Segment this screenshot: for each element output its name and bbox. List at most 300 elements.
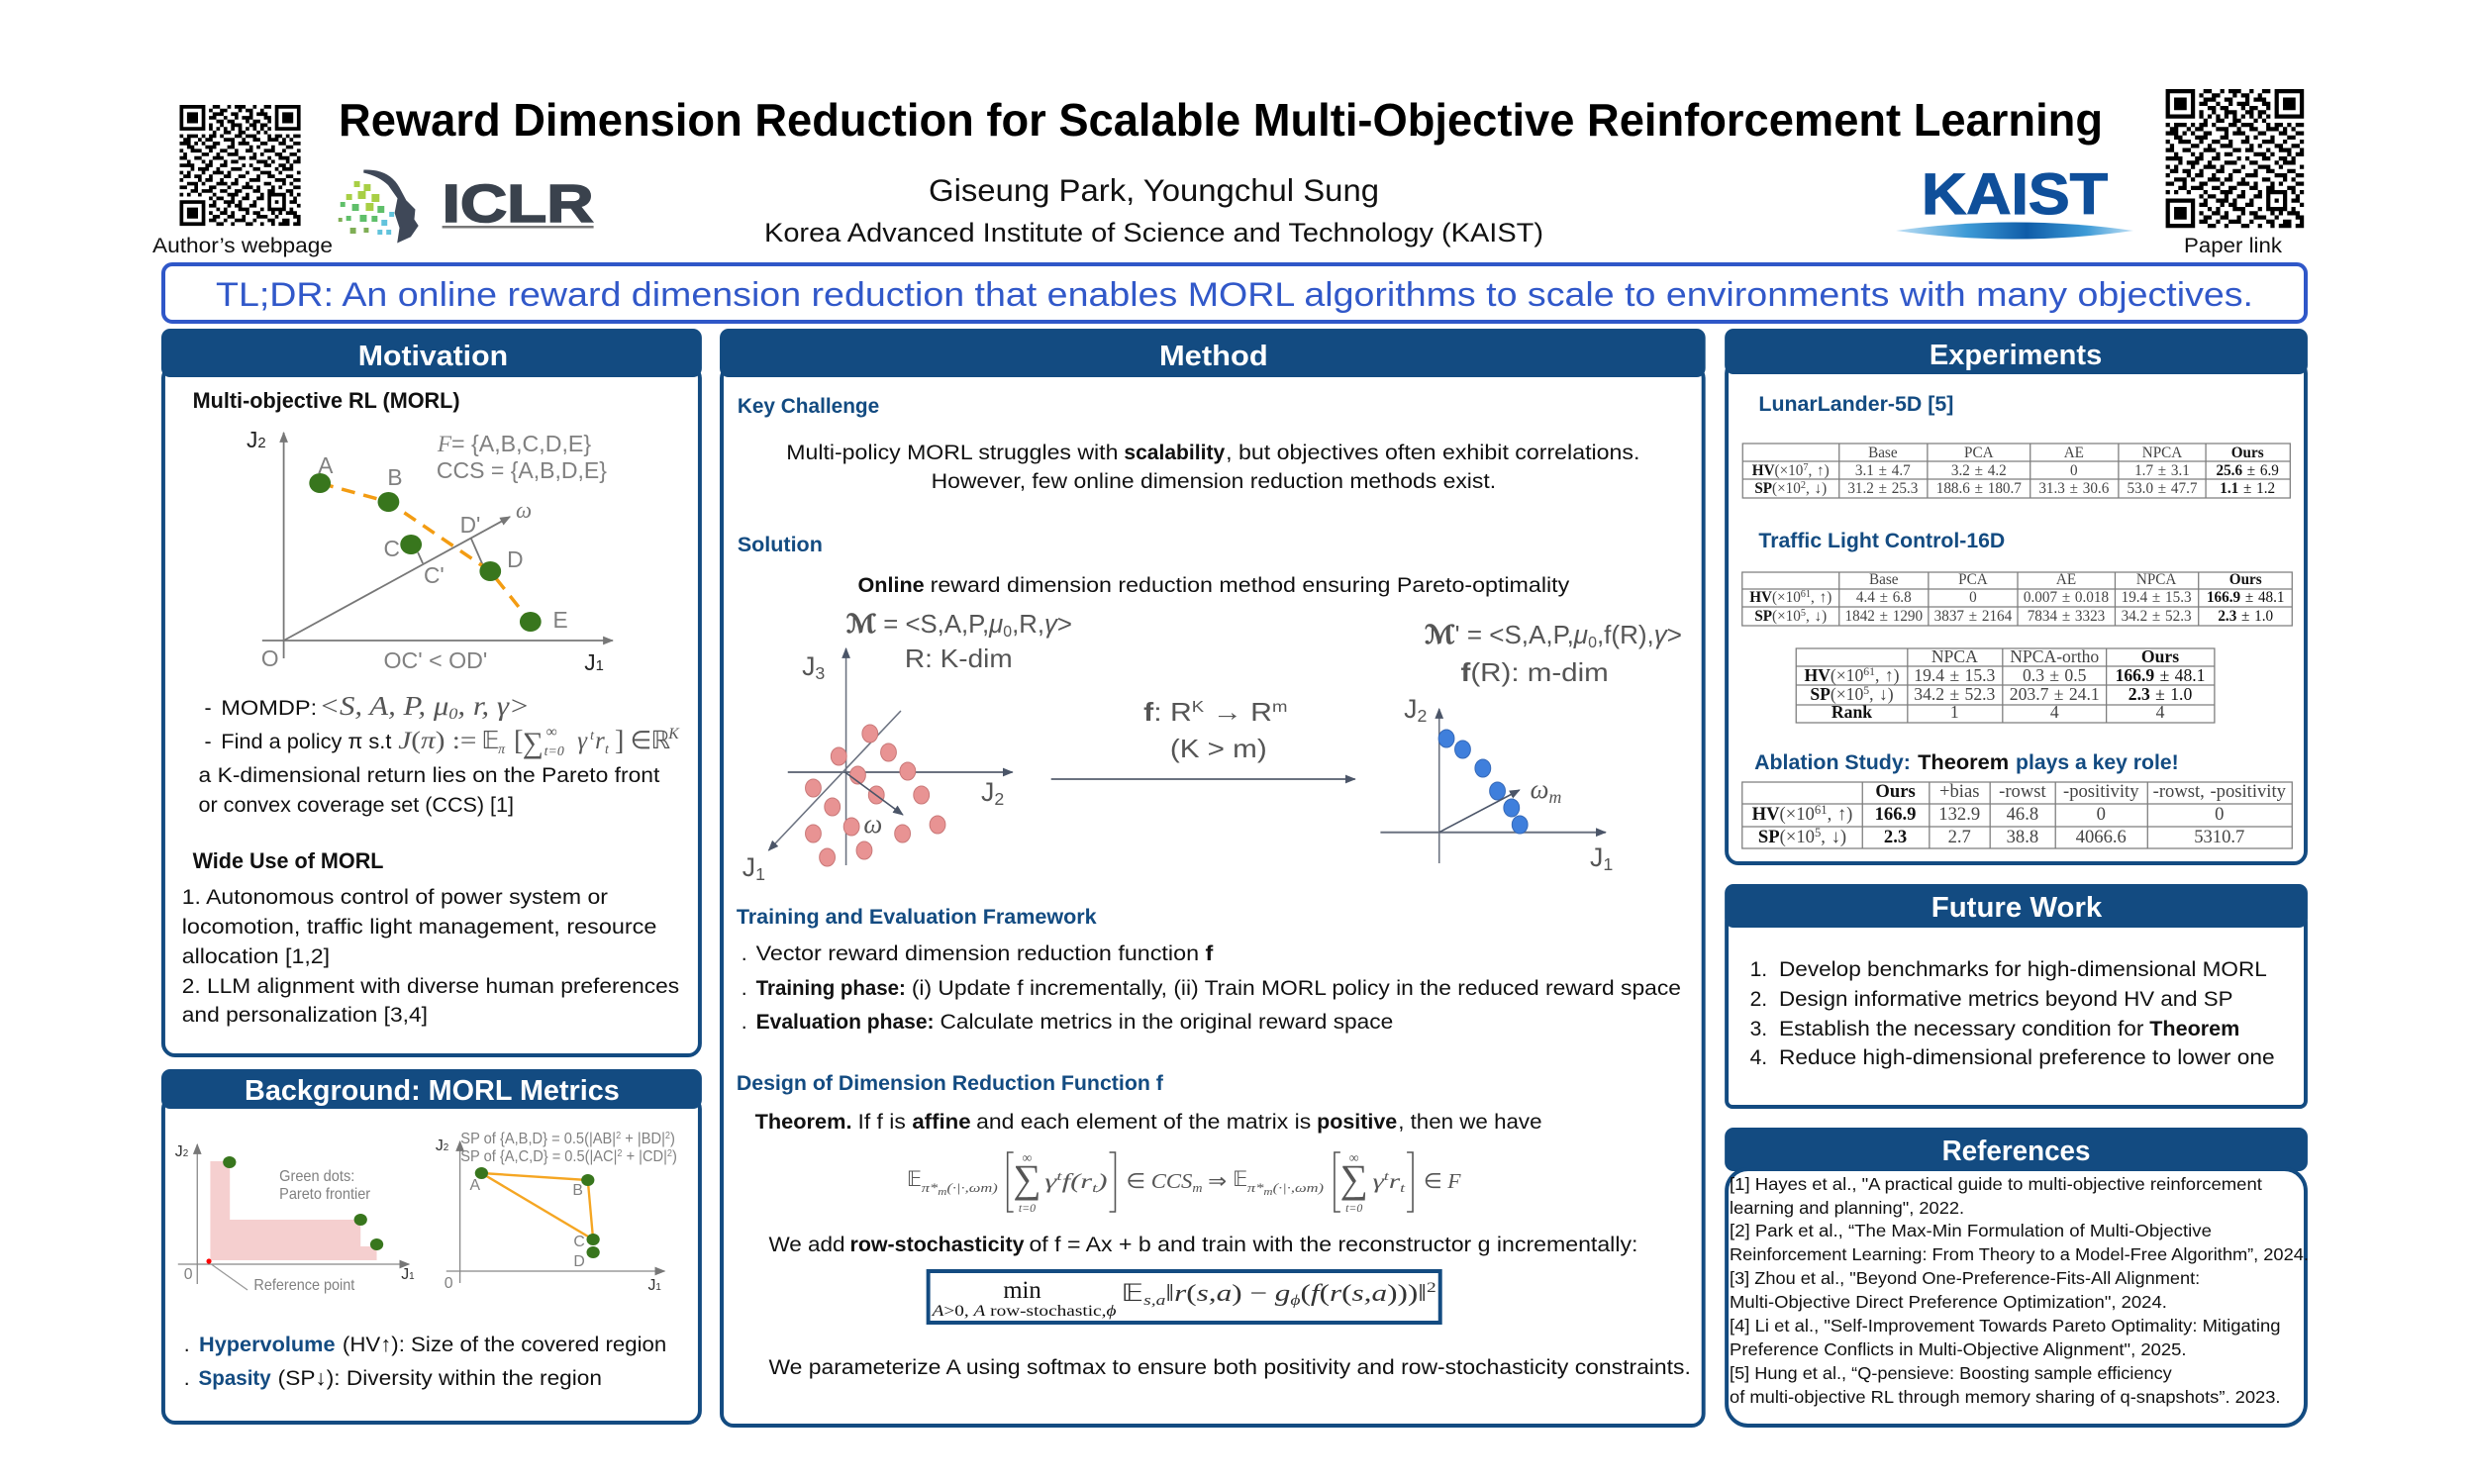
subheading: Multi-objective RL: Multi-objective RL (MORL) (193, 388, 460, 413)
table: NPCA comparison: HV(×10 (1804, 665, 1863, 685)
text: policy objective: [ (514, 725, 524, 756)
formula: theorem: ∈ CCS (1126, 1169, 1189, 1193)
text: reference list: [1] Hayes et al., "A practical guide to multi-objective reinforcement (1730, 1174, 2262, 1194)
formula: theorem: m (1192, 1180, 1203, 1195)
table: Traffic Light results: 2.3 ± 1.0 (2218, 608, 2273, 625)
formula: reduced MOMDP (1425, 621, 1682, 687)
table: Ablation results: Ours (1875, 781, 1916, 802)
subheading: Wide Use of MORL: Wide Use of MORL (193, 848, 383, 873)
text: training list: . (742, 976, 747, 1000)
table: NPCA comparison: , ↓) (1869, 684, 1894, 705)
TL;DR banner: TL;DR: An online reward dimension reduction that enables MORL algorithms to scale to environments with many objectives. (216, 276, 2253, 314)
text: future work list: 1. (1750, 957, 1767, 981)
formula box: reconstruction objective: 2 (1427, 1280, 1436, 1296)
table: LunarLander results: Base (1868, 445, 1898, 461)
chart: Pareto front: D (507, 546, 524, 572)
text: theorem statement: positive (1317, 1110, 1397, 1134)
table: Ablation results: 166.9 (1875, 804, 1916, 825)
text: policy objective: 𝔼 (481, 728, 499, 754)
formula: theorem: t=0 (1345, 1201, 1362, 1215)
table: Traffic Light results: NPCA (2136, 571, 2176, 588)
panel: Future Work (1725, 884, 2308, 1107)
formula: theorem: r (1389, 1169, 1401, 1193)
table: NPCA comparison: 203.7 ± 24.1 (2010, 684, 2100, 704)
caption: Author's webpage: Author’s webpage (152, 235, 333, 257)
text: future work list: 2. (1750, 987, 1767, 1011)
table: LunarLander results: SP(×10 (1754, 480, 1801, 497)
chart: sparsity: SP of {A,C,D} = 0.5(|AC| (460, 1148, 630, 1165)
table: NPCA comparison: 4 (2156, 702, 2165, 722)
chart: hypervolume: 0 (184, 1266, 193, 1283)
chart: sparsity: 2 (665, 1131, 670, 1141)
text: policy objective: t=0 (544, 744, 564, 759)
table: LunarLander results: 25.6 ± 6.9 (2216, 462, 2279, 479)
table: LunarLander results: 3.2 ± 4.2 (1951, 462, 2007, 479)
text: policy objective (204, 724, 680, 759)
subheading: Ablation Study: Ablation Study: (1754, 750, 1911, 774)
table: LunarLander results: 0 (2070, 462, 2078, 479)
text: training list: Evaluation phase: (756, 1010, 935, 1034)
logo: KAIST (1896, 162, 2133, 240)
text: theorem statement: affine (912, 1110, 971, 1134)
text: key challenge body: However, few online dimension reduction methods exist. (932, 469, 1496, 493)
formula box: reconstruction objective: f(r(s,a )))‖ (1311, 1281, 1417, 1307)
table: Traffic Light results: Ours (2229, 571, 2262, 588)
text: solution summary: reward dimension reduction method ensuring Pareto-optimality (931, 573, 1570, 597)
chart: K-dimensional scatter: ω (863, 809, 882, 839)
table: Ablation results: , ↓) (1821, 827, 1846, 847)
chart: Pareto front: C' (424, 562, 445, 588)
text: sparsity definition: . (184, 1366, 190, 1390)
text: training list: . (742, 1010, 747, 1034)
text: MOMDP: MOMDP: (221, 696, 317, 720)
formula: theorem: t (1384, 1168, 1389, 1183)
table: Ablation results: HV(×10 (1752, 804, 1815, 825)
panel: Motivation (161, 329, 702, 1055)
arrow: dimension reduction map f: K (1192, 699, 1205, 716)
table: Ablation results: 0 (2215, 804, 2224, 825)
formula: theorem: ∑ (1340, 1157, 1368, 1201)
text: reference list: [3] Zhou et al., "Beyond One-Preference-Fits-All Alignment: (1730, 1268, 2200, 1288)
text: reference list: [2] Park et al., “The Max-Min Formulation of Multi-Objective (1730, 1221, 2212, 1240)
formula: reduced MOMDP: 0 (1588, 635, 1597, 651)
chart: sparsity: 2 (667, 1148, 672, 1159)
formula: theorem: γ (1044, 1169, 1052, 1193)
logo: KAIST: KAIST (1922, 162, 2108, 227)
chart: hypervolume: J2 (175, 1143, 189, 1160)
text: training list: Vector reward dimension reduction function f (756, 941, 1214, 965)
arrow: dimension reduction map f: → R (1204, 699, 1272, 727)
formula: theorem: ∑ (1013, 1157, 1041, 1201)
heading: Motivation: Motivation (358, 341, 508, 372)
formula: theorem: ⇒ (1203, 1169, 1227, 1193)
QR code: paper link (2166, 89, 2304, 228)
chart: K-dimensional scatter: 3 (815, 663, 825, 683)
table: Traffic Light results: 1842 ± 1290 (1845, 608, 1923, 625)
formula: theorem: ∈ F (1424, 1169, 1461, 1193)
text: MOMDP: - (204, 696, 212, 720)
table: Traffic Light results: SP(×10 (1754, 608, 1801, 625)
subheading: LunarLander-5D: LunarLander-5D [5] (1758, 392, 1953, 416)
text: MOMDP (204, 691, 530, 723)
formula: theorem: t=0 (1019, 1201, 1036, 1215)
logo text: ICLR: ICLR (443, 174, 594, 234)
panel: References (1725, 1128, 2309, 1426)
table: NPCA comparison: SP(×10 (1810, 684, 1863, 704)
text: future work list: 4. (1750, 1045, 1767, 1069)
chart: sparsity: J2 (436, 1138, 449, 1154)
chart: m-dimensional Pareto points: J (1404, 694, 1417, 724)
formula: theorem: f(r (1062, 1169, 1093, 1193)
chart: m-dimensional Pareto points: 2 (1417, 706, 1427, 726)
table: LunarLander results: 2 (1801, 480, 1806, 491)
text: row-stochasticity (768, 1233, 1637, 1256)
formula: theorem: t (1056, 1168, 1062, 1183)
table: Traffic Light results (1742, 571, 2292, 626)
chart: sparsity: + |CD| (623, 1148, 667, 1165)
text: hypervolume definition: . (184, 1333, 190, 1356)
text: Pareto front description (199, 763, 659, 817)
formula: reduced MOMDP: γ> (1654, 622, 1682, 649)
text: MOMDP: <S, A, P, μ (319, 691, 432, 721)
table: Ablation results: 5310.7 (2194, 827, 2244, 847)
chart: hypervolume: Pareto frontier (279, 1186, 371, 1203)
text: reference list: [4] Li et al., "Self-Improvement Towards Pareto Optimality: Mitigating (1730, 1316, 2281, 1336)
chart: K-dimensional scatter: J (742, 852, 755, 882)
formula box: reconstruction objective: 𝔼 (1121, 1281, 1138, 1307)
table: LunarLander results: PCA (1964, 445, 1994, 461)
text: future work list: Reduce high-dimensional preference to lower one (1779, 1045, 2275, 1069)
formula: theorem: m (1263, 1187, 1273, 1198)
subheading: Ablation Study: plays a key role! (2016, 750, 2179, 774)
heading: Experiments: Experiments (1930, 340, 2102, 371)
formula: theorem: π* (1247, 1180, 1260, 1195)
table: NPCA comparison: NPCA (1931, 646, 1978, 666)
text: hypervolume definition: (HV↑): Size of the covered region (343, 1333, 666, 1356)
formula: original MOMDP: ,R, (1012, 611, 1044, 639)
formula box: reconstruction objective: ( (1301, 1281, 1311, 1307)
table: Ablation results: -rowst (1999, 781, 2046, 802)
text: softmax parameterization: We parameterize A using softmax to ensure both positivity and row-stochasticity constraints. (768, 1355, 1691, 1379)
text: policy objective: J(π) := (398, 728, 476, 754)
chart: Pareto front: F= {A,B,C,D,E} (437, 431, 591, 456)
table: LunarLander results: 31.2 ± 25.3 (1847, 480, 1919, 497)
chart: sparsity: + |BD| (621, 1131, 665, 1147)
text: policy objective: Find a policy π s.t (221, 730, 391, 753)
formula: theorem: ) (1096, 1169, 1108, 1193)
chart: K-dimensional scatter: J (802, 651, 815, 681)
text: policy objective: ∞ (546, 724, 557, 741)
formula: original MOMDP: ℳ = <S,A,P,μ (846, 610, 1003, 639)
formula: theorem: t (1400, 1180, 1406, 1195)
text: reference list: Preference Conflicts in Multi-Objective Alignment", 2025. (1730, 1339, 2186, 1359)
table: Ablation results: 132.9 (1938, 804, 1980, 825)
text: policy objective: ] (615, 725, 624, 756)
table: NPCA comparison: 34.2 ± 52.3 (1914, 684, 1995, 704)
formula: original MOMDP: γ> (1044, 611, 1072, 639)
table: Ablation results: 46.8 (2007, 804, 2038, 825)
formula: theorem: ∞ (1023, 1151, 1032, 1166)
formula box: reconstruction objective: ϕ (1290, 1293, 1301, 1309)
table: Ablation results: -rowst, -positivity (2153, 781, 2287, 802)
table: NPCA comparison (1796, 646, 2215, 723)
text: future work list: Establish the necessary condition for (1779, 1017, 2143, 1040)
heading: Design of Dimension Reduction Function f: Design of Dimension Reduction Function f (737, 1071, 1164, 1095)
formula: theorem (907, 1151, 1461, 1215)
chart: sparsity: C (573, 1234, 585, 1250)
table: LunarLander results: 7 (1803, 462, 1808, 473)
text: sparsity definition: (SP↓): Diversity within the region (278, 1366, 602, 1390)
table: Ablation results: 5 (1815, 826, 1821, 840)
text: uses list: allocation [1,2] (182, 944, 330, 968)
authors: Giseung Park, Youngchul Sung (929, 172, 1379, 208)
text: policy objective: ∈ (631, 728, 651, 754)
formula: original MOMDP (846, 610, 1072, 673)
chart: hypervolume: Reference point (253, 1277, 355, 1294)
table: Traffic Light results: 0.007 ± 0.018 (2024, 589, 2109, 606)
table: LunarLander results: 188.6 ± 180.7 (1936, 480, 2022, 497)
text: theorem statement: , then we have (1398, 1110, 1542, 1134)
panel: Experiments (1725, 329, 2308, 863)
chart: Pareto front: J2 (247, 427, 266, 452)
chart: sparsity (436, 1131, 677, 1294)
formula box: reconstruction objective: s,a (1143, 1293, 1165, 1309)
text: theorem statement: If f is (857, 1110, 906, 1134)
logo: ICLR (339, 171, 417, 241)
table: Ablation results: SP(×10 (1758, 827, 1815, 847)
table: Traffic Light results: 166.9 ± 48.1 (2207, 589, 2285, 606)
text: Pareto front description: a K-dimensional return lies on the Pareto front (199, 763, 659, 787)
table: NPCA comparison: 2.3 ± 1.0 (2128, 684, 2192, 704)
chart: Pareto front: D' (460, 512, 480, 538)
table: Traffic Light results: 4.4 ± 6.8 (1856, 589, 1912, 606)
table: NPCA comparison: 61 (1863, 664, 1875, 678)
chart: hypervolume: J1 (401, 1266, 415, 1283)
table: LunarLander results: AE (2064, 445, 2084, 461)
formula: theorem: γ (1372, 1169, 1381, 1193)
table: LunarLander results: 1.7 ± 3.1 (2134, 462, 2190, 479)
table: Ablation results: 38.8 (2007, 827, 2038, 847)
formula: theorem: π* (922, 1180, 935, 1195)
table: Ablation results: 2.7 (1948, 827, 1971, 847)
text: policy objective: ∑ (523, 727, 544, 759)
text: sparsity definition: Spasity (199, 1366, 271, 1390)
table: LunarLander results (1742, 444, 2290, 498)
text: row-stochasticity: of f = Ax + b and train with the reconstructor g incrementally: (1029, 1233, 1637, 1256)
text: policy objective: t (605, 742, 610, 757)
text: reference list (1730, 1174, 2309, 1407)
chart: sparsity: J1 (648, 1277, 661, 1294)
table: NPCA comparison: NPCA-ortho (2010, 646, 2099, 666)
text: policy objective: π (498, 742, 506, 757)
chart: K-dimensional scatter: J (981, 777, 994, 807)
formula box: reconstruction objective: min (1003, 1277, 1041, 1304)
heading: Future Work: Future Work (1931, 892, 2102, 924)
chart: sparsity: SP of {A,B,D} = 0.5(|AB| (460, 1131, 629, 1147)
subheading: Ablation Study: Theorem (1918, 750, 2009, 774)
chart: m-dimensional Pareto points: J (1590, 842, 1603, 872)
text: key challenge body: , but objectives often exhibit correlations. (1226, 441, 1639, 464)
formula box: reconstruction objective: ‖ (1165, 1281, 1174, 1307)
table: Traffic Light results: 19.4 ± 15.3 (2122, 589, 2192, 606)
heading: Background: Background: MORL Metrics (245, 1075, 620, 1107)
chart: m-dimensional Pareto points (1380, 694, 1613, 874)
arrow: dimension reduction map f: f: R (1143, 699, 1186, 727)
panel: Method (720, 329, 1706, 1426)
affiliation: Korea Advanced Institute of Science and Technology (KAIST) (764, 218, 1543, 247)
text: training list (742, 941, 1681, 1034)
text: policy objective: r (595, 728, 605, 754)
chart: Pareto front: B (387, 464, 403, 490)
table: Ablation results: 61 (1815, 803, 1828, 817)
text: policy objective: K (667, 726, 680, 742)
chart: Pareto front (247, 427, 613, 675)
text: policy objective: t (590, 729, 595, 743)
text: MOMDP: 0 (448, 706, 457, 723)
chart: Pareto front: A (318, 452, 334, 478)
table: NPCA comparison: 1 (1950, 702, 1959, 722)
chart: m-dimensional Pareto points: ω (1531, 774, 1549, 804)
text: row-stochasticity: We add (768, 1233, 845, 1256)
panel: Background (161, 1069, 702, 1423)
table: Traffic Light results: HV(×10 (1749, 589, 1801, 606)
text: Pareto front description: or convex coverage set (CCS) [1] (199, 793, 514, 817)
table: NPCA comparison: , ↑) (1875, 665, 1900, 686)
chart: sparsity: A (470, 1177, 480, 1194)
chart: Pareto front: O (261, 645, 279, 671)
table: Traffic Light results: , ↓) (1806, 608, 1827, 625)
chart: sparsity: ) (670, 1131, 675, 1147)
chart: K-dimensional scatter: 2 (994, 789, 1004, 809)
table: Traffic Light results: 3837 ± 2164 (1934, 608, 2013, 625)
text: uses list: 1. Autonomous control of power system or (182, 885, 608, 909)
text: hypervolume definition (184, 1333, 666, 1356)
formula box: reconstruction objective: A>0, A row-stochastic, ϕ (931, 1303, 1116, 1320)
text: row-stochasticity: row-stochasticity (850, 1233, 1025, 1256)
table: NPCA comparison: Rank (1832, 702, 1872, 722)
chart: Pareto front: ω (516, 498, 532, 523)
text: future work list: 3. (1750, 1017, 1767, 1040)
chart: sparsity: 2 (616, 1131, 622, 1141)
formula: theorem: m (938, 1187, 946, 1198)
table: Traffic Light results: Base (1869, 571, 1899, 588)
table: NPCA comparison: 5 (1863, 683, 1869, 697)
chart: K-dimensional scatter: 1 (755, 864, 765, 884)
table: LunarLander results: HV(×10 (1752, 462, 1803, 479)
table: Ablation results: 2.3 (1884, 827, 1907, 847)
table: Ablation results: +bias (1939, 781, 1979, 802)
arrow: dimension reduction map f: m (1272, 699, 1287, 716)
subheading: Ablation Study (1754, 750, 2179, 774)
table: Traffic Light results: 34.2 ± 52.3 (2122, 608, 2192, 625)
formula: theorem: t (1092, 1180, 1098, 1195)
arrow: dimension reduction map f: (K > m) (1170, 736, 1267, 763)
table: NPCA comparison: Ours (2141, 646, 2179, 666)
caption: Paper link: Paper link (2184, 235, 2283, 257)
chart: sparsity: 0 (445, 1275, 453, 1292)
formula box: reconstruction objective: r(s,a ) − g (1174, 1281, 1287, 1307)
chart: sparsity: D (573, 1253, 585, 1270)
table: Traffic Light results: 7834 ± 3323 (2028, 608, 2106, 625)
QR code: author's webpage (180, 105, 301, 226)
title: Reward Dimension Reduction for Scalable Multi-Objective Reinforcement Learning (339, 94, 2103, 146)
subheading: Traffic Light Control: Traffic Light Control-16D (1758, 529, 2005, 552)
text: uses list: locomotion, traffic light management, resource (182, 915, 656, 939)
table: Ablation results: , ↑) (1828, 804, 1852, 825)
formula: reduced MOMDP: ,f(R), (1597, 622, 1654, 649)
table: Traffic Light results: 0 (1969, 589, 1977, 606)
text: training list: Calculate metrics in the original reward space (940, 1010, 1393, 1034)
heading: Key Challenge: Key Challenge (738, 394, 879, 418)
text: uses list: 2. LLM alignment with diverse human preferences (182, 974, 679, 998)
chart: m-dimensional Pareto points: m (1549, 787, 1561, 807)
text: hypervolume definition: Hypervolume (199, 1333, 336, 1356)
text: key challenge body: scalability (1124, 441, 1225, 464)
chart: K-dimensional scatter (742, 648, 1013, 884)
table: Ablation results (1742, 781, 2292, 848)
table: Traffic Light results: PCA (1958, 571, 1988, 588)
text: key challenge body (786, 441, 1639, 493)
text: theorem statement: Theorem. (755, 1110, 852, 1134)
formula: theorem: 𝔼 (1233, 1167, 1247, 1191)
text: uses list (182, 885, 679, 1027)
arrow: dimension reduction map f (1051, 699, 1355, 779)
table: LunarLander results: , ↑) (1808, 462, 1830, 479)
heading: Method: Method (1159, 341, 1268, 372)
table: LunarLander results: Ours (2231, 445, 2264, 461)
chart: Pareto front: E (553, 607, 568, 633)
text: policy objective: ℝ (650, 728, 670, 754)
table: Traffic Light results: AE (2056, 571, 2076, 588)
text: reference list: Multi-Objective Direct Preference Optimization", 2024. (1730, 1292, 2167, 1312)
table: Ablation results: 4066.6 (2076, 827, 2127, 847)
text: key challenge body: Multi-policy MORL struggles with (786, 441, 1118, 464)
text: reference list: [5] Hung et al., “Q-pensieve: Boosting sample efficiency (1730, 1363, 2172, 1383)
table: NPCA comparison: 166.9 ± 48.1 (2116, 665, 2205, 685)
table: Traffic Light results: 5 (1801, 608, 1806, 619)
text: theorem statement (755, 1110, 1542, 1134)
text: solution summary: Online (857, 573, 925, 597)
chart: Pareto front: J1 (584, 649, 604, 675)
table: Traffic Light results: 61 (1801, 589, 1811, 600)
chart: sparsity: ) (672, 1148, 677, 1165)
text: reference list: learning and planning", 2022. (1730, 1198, 1964, 1218)
text: policy objective: γ (577, 728, 588, 754)
heading: Solution: Solution (738, 533, 823, 556)
text: reference list: Reinforcement Learning: From Theory to a Model-Free Algorithm”, 2024. (1730, 1244, 2309, 1264)
text: policy objective: - (204, 730, 212, 753)
formula: theorem: ∞ (1349, 1151, 1359, 1166)
text: MOMDP: , r, γ> (457, 691, 530, 721)
formula: theorem: (·|·,ωm) (1273, 1180, 1324, 1195)
text: future work list: Develop benchmarks for high-dimensional MORL (1779, 957, 2267, 981)
chart: sparsity: B (572, 1182, 583, 1199)
table: NPCA comparison: 19.4 ± 15.3 (1914, 665, 1995, 685)
text: training list: Training phase: (756, 976, 906, 1000)
formula: original MOMDP: 0 (1003, 624, 1012, 641)
text: future work list (1750, 957, 2275, 1069)
table: LunarLander results: 53.0 ± 47.7 (2127, 480, 2198, 497)
chart: Pareto front: CCS = {A,B,D,E} (437, 457, 607, 483)
table: NPCA comparison: 0.3 ± 0.5 (2023, 665, 2087, 685)
text: training list: (i) Update f incrementally, (ii) Train MORL policy in the reduced reward space (912, 976, 1681, 1000)
text: uses list: and personalization [3,4] (182, 1003, 428, 1027)
table: LunarLander results: 1.1 ± 1.2 (2220, 480, 2275, 497)
chart: sparsity: 2 (617, 1148, 623, 1159)
chart: Pareto front: OC' < OD' (383, 647, 487, 673)
TL;DR banner (163, 264, 2306, 322)
heading: References: References (1942, 1136, 2090, 1167)
